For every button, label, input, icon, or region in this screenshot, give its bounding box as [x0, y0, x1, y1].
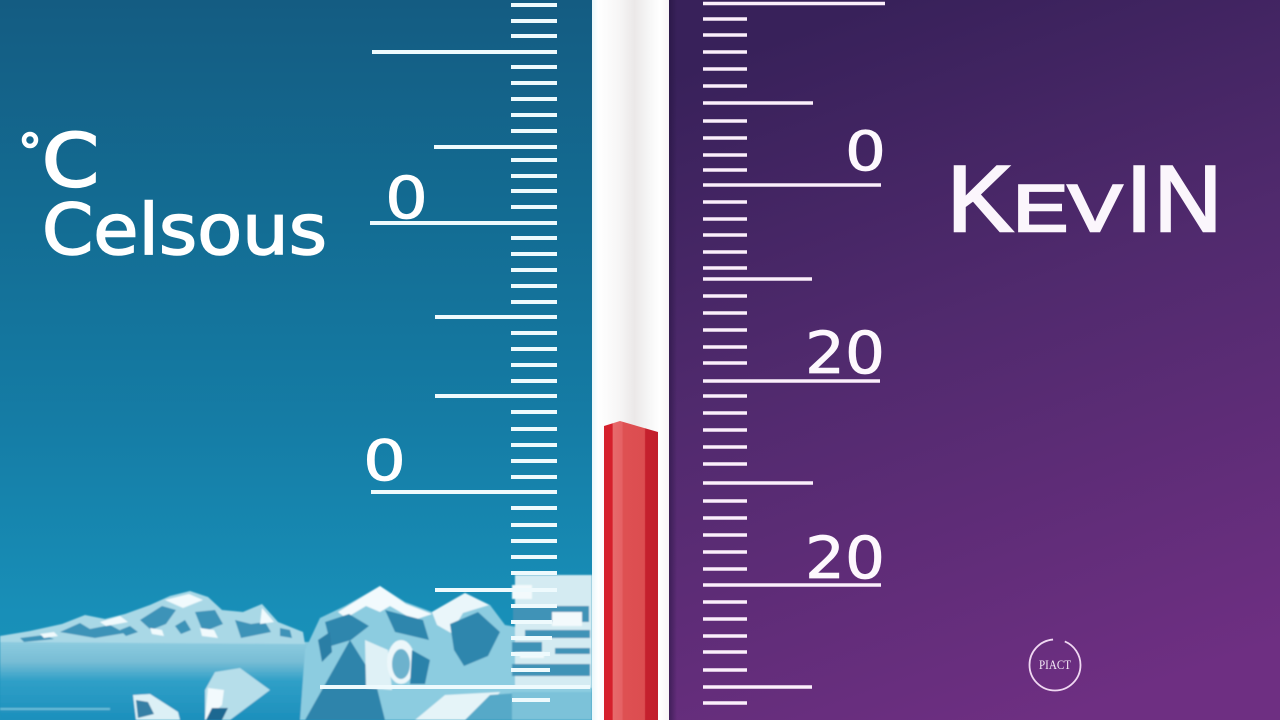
label: Kelvin upper 20: 20 — [805, 319, 885, 387]
heading: Celsous: Celsous — [42, 189, 327, 271]
heading: Kelvin: N — [1154, 146, 1222, 251]
panel: Celsius background — [0, 0, 592, 720]
logo: circular badge: PIACT — [1039, 657, 1071, 672]
label: Celsius lower zero: 0 — [363, 429, 406, 494]
label: Kelvin lower 20: 20 — [805, 524, 885, 592]
illustration: icy mountain landscape — [0, 575, 592, 720]
heading: Kelvin: E — [1013, 171, 1068, 245]
scale: Kelvin tick marks — [703, 4, 885, 703]
mercury column — [604, 421, 658, 720]
label: Kelvin zero: 0 — [845, 120, 886, 183]
heading: Kelvin — [947, 146, 1222, 251]
label: Celsius upper zero: 0 — [385, 164, 428, 232]
heading: Celsius symbol — [24, 119, 99, 204]
heading: Kelvin: V — [1068, 171, 1122, 245]
heading: Celsius symbol: C — [42, 119, 99, 204]
logo: circular badge — [1030, 640, 1080, 690]
panel: Kelvin background — [668, 0, 1280, 720]
scale: Celsius tick marks — [320, 5, 590, 700]
heading: Kelvin: K — [947, 146, 1013, 251]
thermometer tube — [592, 0, 669, 720]
heading: Kelvin: I — [1126, 146, 1152, 251]
